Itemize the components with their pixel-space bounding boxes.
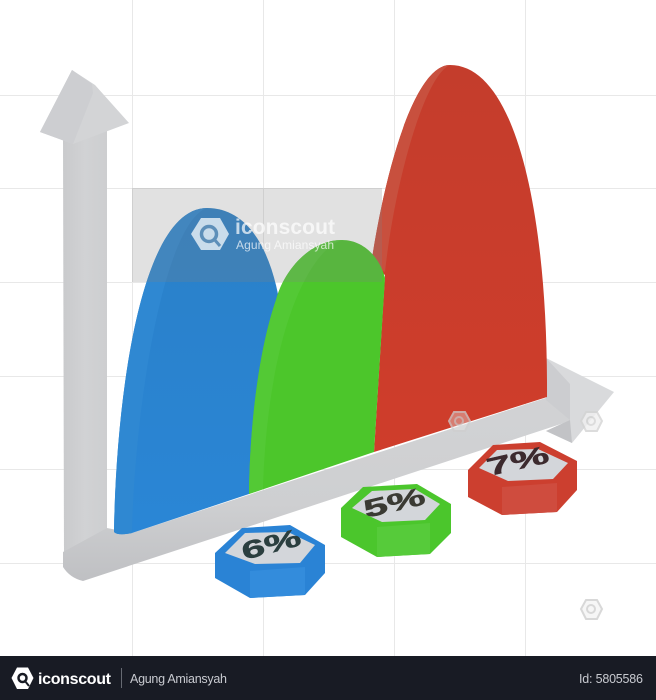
footer author: Agung Amiansyah [130, 672, 227, 686]
badge: 7%: 7% [484, 440, 552, 481]
footer divider [121, 668, 122, 688]
green curve bar [249, 240, 385, 494]
badge: 5% [341, 483, 451, 557]
watermark text: iconscout [235, 216, 335, 239]
badge: 6% [215, 524, 325, 598]
badge: 6%: 6% [239, 524, 304, 566]
arrowhead right [546, 358, 614, 443]
badge: 7% [468, 440, 577, 515]
footer brand: iconscout [38, 671, 112, 688]
small watermark: right [581, 412, 602, 431]
vertical axis arrow [40, 70, 129, 565]
footer bar [0, 656, 656, 700]
badge: 5%: 5% [361, 483, 428, 523]
watermark text [235, 216, 335, 252]
watermark logo [191, 218, 229, 250]
blue curve bar [114, 208, 282, 534]
small watermark: bottom [581, 600, 602, 619]
horizontal axis arrow [63, 358, 614, 581]
footer logo icon [12, 668, 34, 689]
arrowhead up [40, 70, 129, 144]
small watermark: centre [449, 412, 470, 431]
footer id: Id: 5805586 [579, 672, 643, 686]
watermark text: Agung Amiansyah [236, 238, 334, 252]
red curve bar [371, 65, 547, 452]
translucent watermark panel [132, 188, 382, 282]
